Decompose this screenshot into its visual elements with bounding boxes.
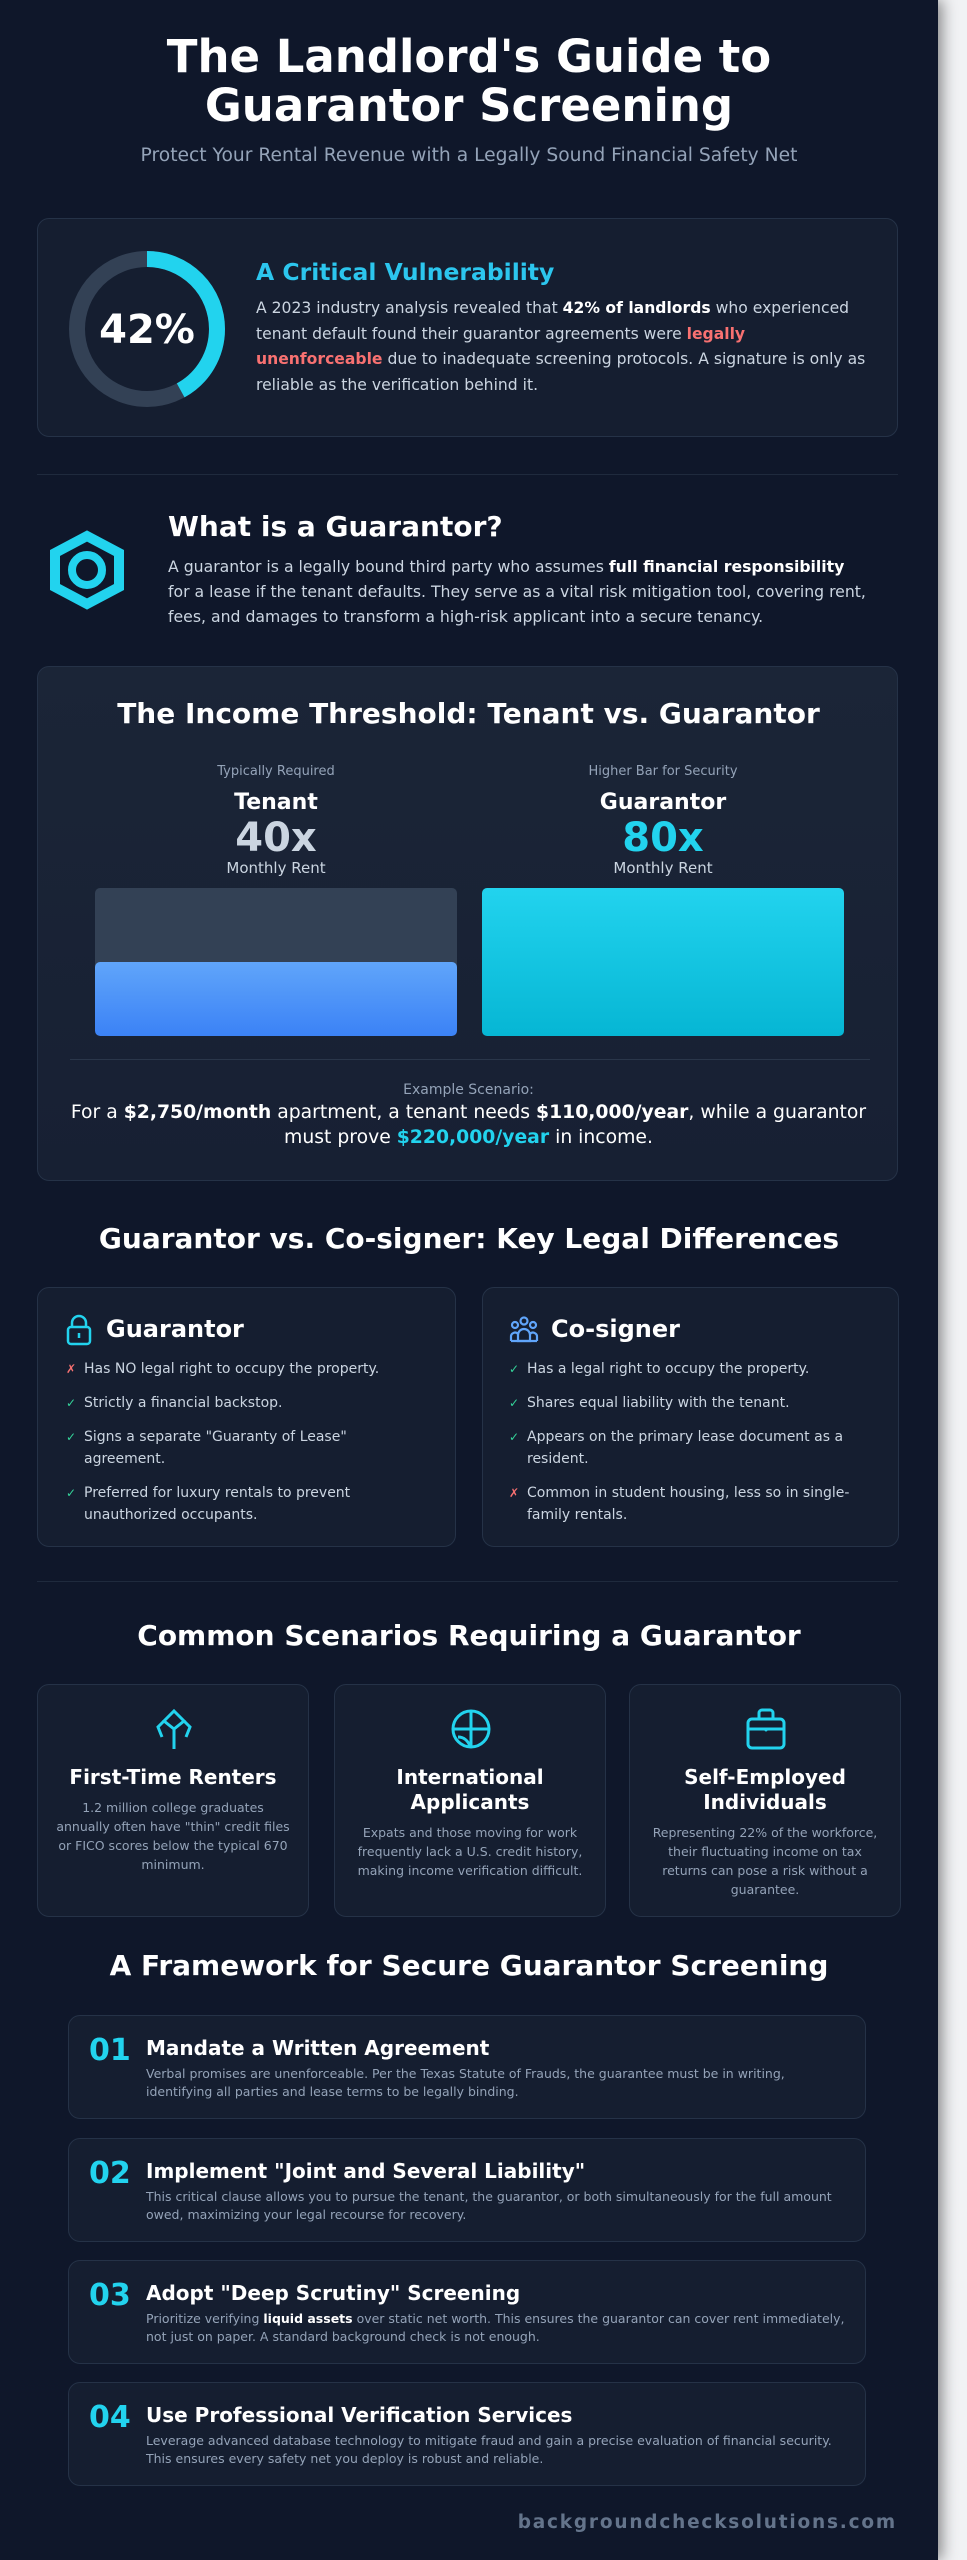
step 02: Implement "Joint and Several Liability" bbox=[146, 2159, 585, 2183]
bar: guarantor bbox=[482, 888, 844, 1036]
step 02: This critical clause allows you to pursue the tenant, the guarantor, or both simultaneously for the full amount owed, maximizing your legal recourse for recovery. bbox=[146, 2189, 832, 2222]
list: guarantor traits: Strictly a financial backstop. bbox=[84, 1395, 282, 1411]
text: example scenario: For a $2,750/month apartment, a tenant needs $110,000/year, while a guarantor must prove $220,000/year in income. bbox=[71, 1102, 866, 1148]
step 04: 04 bbox=[89, 2400, 131, 2435]
column: guarantor: Higher Bar for Security bbox=[588, 764, 738, 779]
panel: international applicants bbox=[334, 1684, 606, 1917]
heading: guarantor vs co-signer: Guarantor vs. Co-signer: Key Legal Differences bbox=[99, 1222, 839, 1255]
step 01: Mandate a Written Agreement bbox=[146, 2036, 489, 2060]
footer: website: backgroundchecksolutions.com bbox=[518, 2512, 897, 2533]
step 03 bbox=[68, 2260, 866, 2364]
list: co-signer traits bbox=[509, 1361, 849, 1523]
description: Expats and those moving for work frequently lack a U.S. credit history, making income verification difficult. bbox=[358, 1825, 582, 1878]
list: co-signer traits: Common in student housing, less so in single-family rentals. bbox=[527, 1485, 849, 1523]
list: co-signer traits: ✓ bbox=[509, 1396, 519, 1410]
icon: lock bbox=[66, 1314, 92, 1346]
description: Representing 22% of the workforce, their fluctuating income on tax returns can pose a risk without a guarantee. bbox=[653, 1825, 877, 1897]
heading: guarantor: Guarantor bbox=[106, 1315, 244, 1343]
list: guarantor traits: Preferred for luxury rentals to prevent unauthorized occupants. bbox=[84, 1485, 350, 1523]
list: co-signer traits: ✓ bbox=[509, 1430, 519, 1444]
icon: people bbox=[510, 1316, 538, 1342]
donut chart 42%: 42% bbox=[99, 307, 195, 353]
step 03: 03 bbox=[89, 2278, 131, 2313]
list: co-signer traits: Appears on the primary lease document as a resident. bbox=[527, 1429, 843, 1467]
heading: common scenarios: Common Scenarios Requiring a Guarantor bbox=[137, 1619, 801, 1652]
title bbox=[396, 1765, 544, 1814]
column: tenant bbox=[95, 764, 457, 1036]
step 03: Adopt "Deep Scrutiny" Screening bbox=[146, 2281, 520, 2305]
panel: critical vulnerability bbox=[37, 218, 898, 437]
text: example scenario bbox=[71, 1082, 866, 1148]
list: co-signer traits: Shares equal liability with the tenant. bbox=[527, 1395, 790, 1411]
bar: tenant bbox=[95, 888, 457, 1036]
list: guarantor traits: Has NO legal right to occupy the property. bbox=[84, 1361, 379, 1377]
title: Individuals bbox=[703, 1790, 827, 1814]
title: International bbox=[396, 1765, 544, 1789]
list: guarantor traits: ✓ bbox=[66, 1486, 76, 1500]
step 01: 01 bbox=[89, 2033, 131, 2068]
column: tenant: Tenant bbox=[234, 790, 318, 815]
column: tenant: 40x bbox=[235, 815, 317, 861]
step 02: 02 bbox=[89, 2156, 131, 2191]
list: guarantor traits: ✗ bbox=[66, 1362, 76, 1376]
title: First-Time Renters bbox=[69, 1765, 277, 1789]
list: guarantor traits: Signs a separate "Guaranty of Lease" agreement. bbox=[84, 1429, 347, 1467]
step 01: Verbal promises are unenforceable. Per the Texas Statute of Frauds, the guarantee must be in writing, identifying all parties and lease terms to be legally binding. bbox=[146, 2066, 785, 2099]
heading: framework: A Framework for Secure Guarantor Screening bbox=[110, 1949, 828, 1982]
panel: co-signer bbox=[482, 1287, 899, 1547]
step 04 bbox=[68, 2382, 866, 2486]
icon: briefcase bbox=[746, 1708, 786, 1750]
panel: first-time renters bbox=[37, 1684, 309, 1917]
heading: critical vulnerability: A Critical Vulnerability bbox=[256, 258, 554, 286]
subtitle: Protect Your Rental Revenue with a Legally Sound Financial Safety Net bbox=[141, 145, 797, 166]
heading: co-signer: Co-signer bbox=[551, 1315, 680, 1343]
list: co-signer traits: Has a legal right to occupy the property. bbox=[527, 1361, 809, 1377]
step 02 bbox=[68, 2138, 866, 2242]
panel: guarantor bbox=[37, 1287, 456, 1547]
title: Self-Employed bbox=[684, 1765, 846, 1789]
list: co-signer traits: ✗ bbox=[509, 1486, 519, 1500]
heading: what is a guarantor: What is a Guarantor? bbox=[168, 510, 503, 543]
text: example scenario: Example Scenario: bbox=[403, 1082, 534, 1098]
step 04: Use Professional Verification Services bbox=[146, 2403, 572, 2427]
column: guarantor bbox=[482, 764, 844, 1036]
step 03: Prioritize verifying liquid assets over static net worth. This ensures the guarantor can cover rent immediately, not just on paper. A standard background check is not enough. bbox=[146, 2311, 844, 2344]
step 04: Leverage advanced database technology to mitigate fraud and gain a precise evaluation of financial security. This ensures every safety net you deploy is robust and reliable. bbox=[146, 2433, 832, 2466]
panel: income threshold bbox=[37, 666, 898, 1181]
title: Guarantor Screening bbox=[205, 79, 733, 132]
list: guarantor traits: ✓ bbox=[66, 1430, 76, 1444]
heading: income threshold: The Income Threshold: Tenant vs. Guarantor bbox=[117, 697, 820, 730]
icon: graduation cap bbox=[156, 1709, 192, 1749]
list: guarantor traits: ✓ bbox=[66, 1396, 76, 1410]
list: co-signer traits: ✓ bbox=[509, 1362, 519, 1376]
step 01 bbox=[68, 2015, 866, 2119]
title bbox=[684, 1765, 846, 1814]
column: tenant: Monthly Rent bbox=[226, 859, 326, 877]
column: guarantor: 80x bbox=[622, 815, 704, 861]
description: 1.2 million college graduates annually often have "thin" credit files or FICO scores below the typical 670 minimum. bbox=[56, 1800, 290, 1872]
column: guarantor: Guarantor bbox=[600, 790, 726, 815]
title: The Landlord's Guide to bbox=[167, 30, 771, 83]
list: guarantor traits bbox=[66, 1361, 379, 1523]
title: Applicants bbox=[411, 1790, 529, 1814]
text: guarantor definition: A guarantor is a legally bound third party who assumes full financial responsibility for a lease if the tenant defaults. They serve as a vital risk mitigation tool, covering rent, fees, and damages to transform a high-risk applicant into a secure tenancy. bbox=[168, 557, 866, 626]
donut chart 42% bbox=[69, 251, 225, 407]
column: guarantor: Monthly Rent bbox=[613, 859, 713, 877]
text: vulnerability body: A 2023 industry analysis revealed that 42% of landlords who experienced tenant default found their guarantor agreements were legally unenforceable due to inadequate screening protocols. A signature is only as reliable as the verification behind it. bbox=[256, 299, 865, 394]
title bbox=[166, 30, 771, 132]
column: tenant: Typically Required bbox=[217, 764, 335, 779]
icon: hexagon bbox=[50, 530, 124, 610]
panel: self-employed bbox=[629, 1684, 901, 1917]
icon: globe bbox=[452, 1710, 490, 1748]
